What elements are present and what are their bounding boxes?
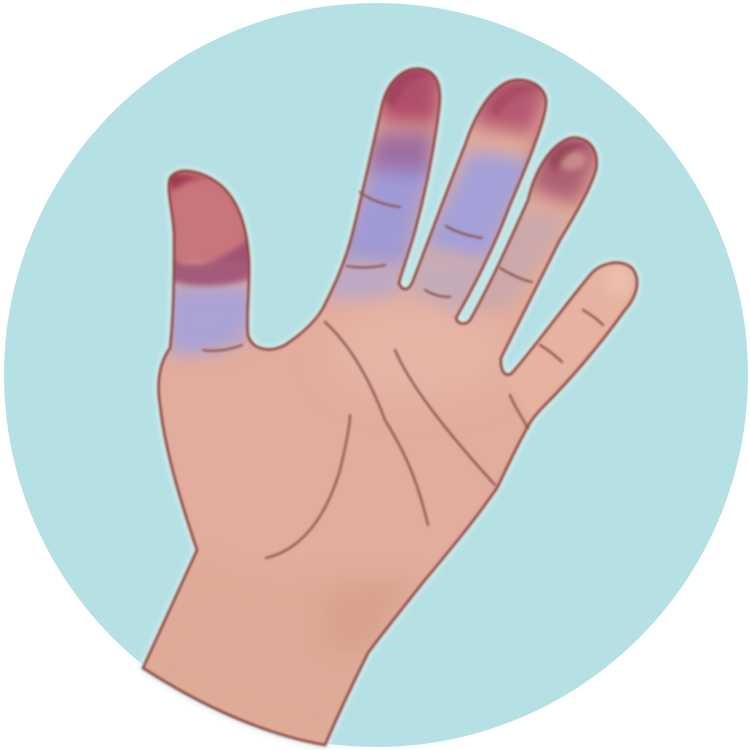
hand light halo (143, 69, 637, 745)
ring tip dark (548, 142, 592, 175)
ring tip light (558, 150, 586, 170)
little finger skin (505, 262, 640, 420)
middle tip dark (491, 83, 538, 116)
index tip dark (385, 70, 426, 106)
thumb dark band (174, 239, 249, 290)
middle base fade (408, 256, 479, 316)
hand (138, 63, 642, 750)
upper palm tint (351, 316, 489, 384)
middle finger red tip (472, 80, 546, 144)
palm creases (203, 192, 603, 558)
thumb blue zone (165, 285, 255, 354)
index base fade (325, 262, 405, 300)
index finger red tip (379, 68, 440, 134)
wrist shade (143, 555, 420, 745)
index finger purple (366, 130, 436, 172)
ring finger red tip (530, 130, 605, 205)
thumb tip dark (169, 172, 206, 193)
ring finger mid (479, 206, 566, 314)
fingertip highlight (607, 268, 629, 291)
middle finger blue (420, 150, 535, 265)
hand colour regions (143, 68, 637, 745)
thumb red tip (169, 171, 247, 264)
wrist patch (341, 595, 382, 638)
hand outline (143, 69, 637, 745)
index finger blue (335, 160, 435, 270)
